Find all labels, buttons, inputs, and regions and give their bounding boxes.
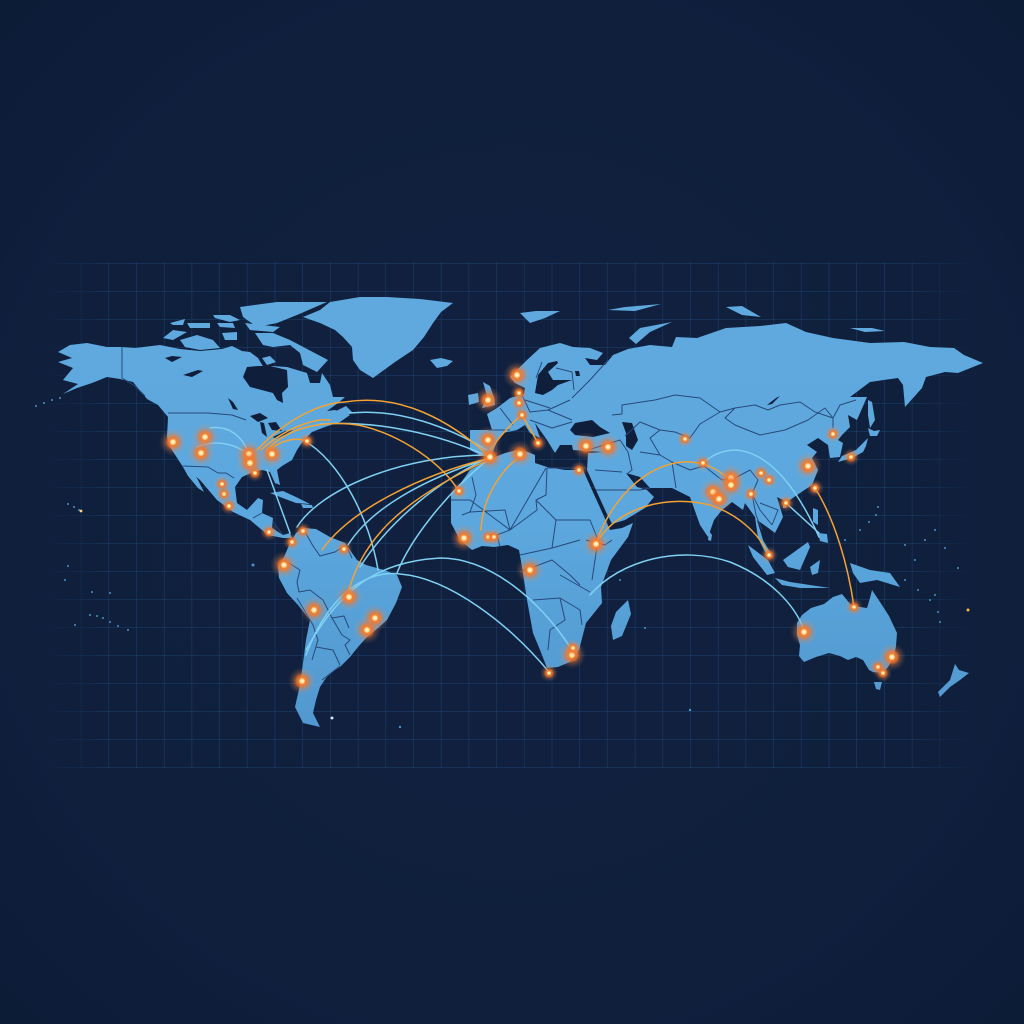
- Sulawesi: [810, 560, 820, 575]
- markers: Europe: [474, 361, 547, 471]
- Novaya Zemlya: [629, 322, 672, 344]
- Tasmania: [874, 682, 882, 690]
- Sakhalin: [868, 400, 875, 428]
- highlighted island dots: [80, 510, 970, 612]
- Philippines: [813, 508, 828, 543]
- South America: [278, 528, 402, 727]
- markers: Oceania: [790, 598, 906, 682]
- Java: [775, 578, 830, 588]
- Newfoundland: [334, 406, 352, 420]
- Cuba: [270, 491, 310, 504]
- North American borders: [122, 347, 283, 535]
- New Zealand: [938, 664, 969, 697]
- light blue arcs: [197, 412, 819, 672]
- Taiwan: [813, 486, 817, 493]
- South American borders: [284, 530, 352, 680]
- Hainan: [783, 505, 786, 508]
- Honshu: [838, 438, 868, 462]
- Africa: [451, 450, 633, 668]
- Sumatra: [748, 545, 775, 575]
- Australia: [797, 590, 897, 673]
- Hudson Bay: [243, 366, 288, 403]
- Franz Josef Land: [608, 304, 661, 311]
- African borders: [451, 468, 612, 650]
- Sri Lanka: [708, 531, 712, 541]
- New Guinea: [850, 563, 900, 587]
- Severnaya Zemlya: [726, 306, 761, 317]
- Hispaniola: [301, 504, 313, 508]
- North America: [58, 343, 350, 538]
- Ireland: [468, 393, 479, 405]
- Hokkaido: [868, 428, 880, 436]
- Arctic archipelago: [163, 302, 328, 372]
- New Siberian Islands: [850, 328, 885, 332]
- connection arcs: [197, 400, 854, 672]
- European borders: [488, 360, 608, 430]
- inland water: [165, 356, 780, 450]
- markers: Asia: [676, 425, 860, 564]
- map grid: [40, 262, 980, 768]
- Baja California: [183, 467, 204, 492]
- Iceland: [430, 358, 453, 368]
- Black Sea: [570, 420, 610, 437]
- Caspian Sea: [622, 422, 638, 450]
- Eurasia: [470, 323, 983, 558]
- Svalbard: [520, 311, 560, 323]
- Borneo: [783, 542, 810, 570]
- world map landmasses: [58, 297, 983, 727]
- small ocean islands: [35, 397, 959, 728]
- markers: Africa and Middle East: [450, 432, 622, 682]
- markers: South America: [260, 522, 389, 695]
- Greenland: [303, 297, 453, 378]
- Great Britain: [482, 382, 495, 408]
- orange arcs: [257, 400, 854, 607]
- Baltic Sea: [535, 361, 572, 395]
- city markers: [159, 361, 906, 695]
- markers: North America: [159, 423, 316, 515]
- country borders: [122, 347, 856, 680]
- Asian borders: [588, 395, 856, 530]
- Madagascar: [611, 600, 631, 640]
